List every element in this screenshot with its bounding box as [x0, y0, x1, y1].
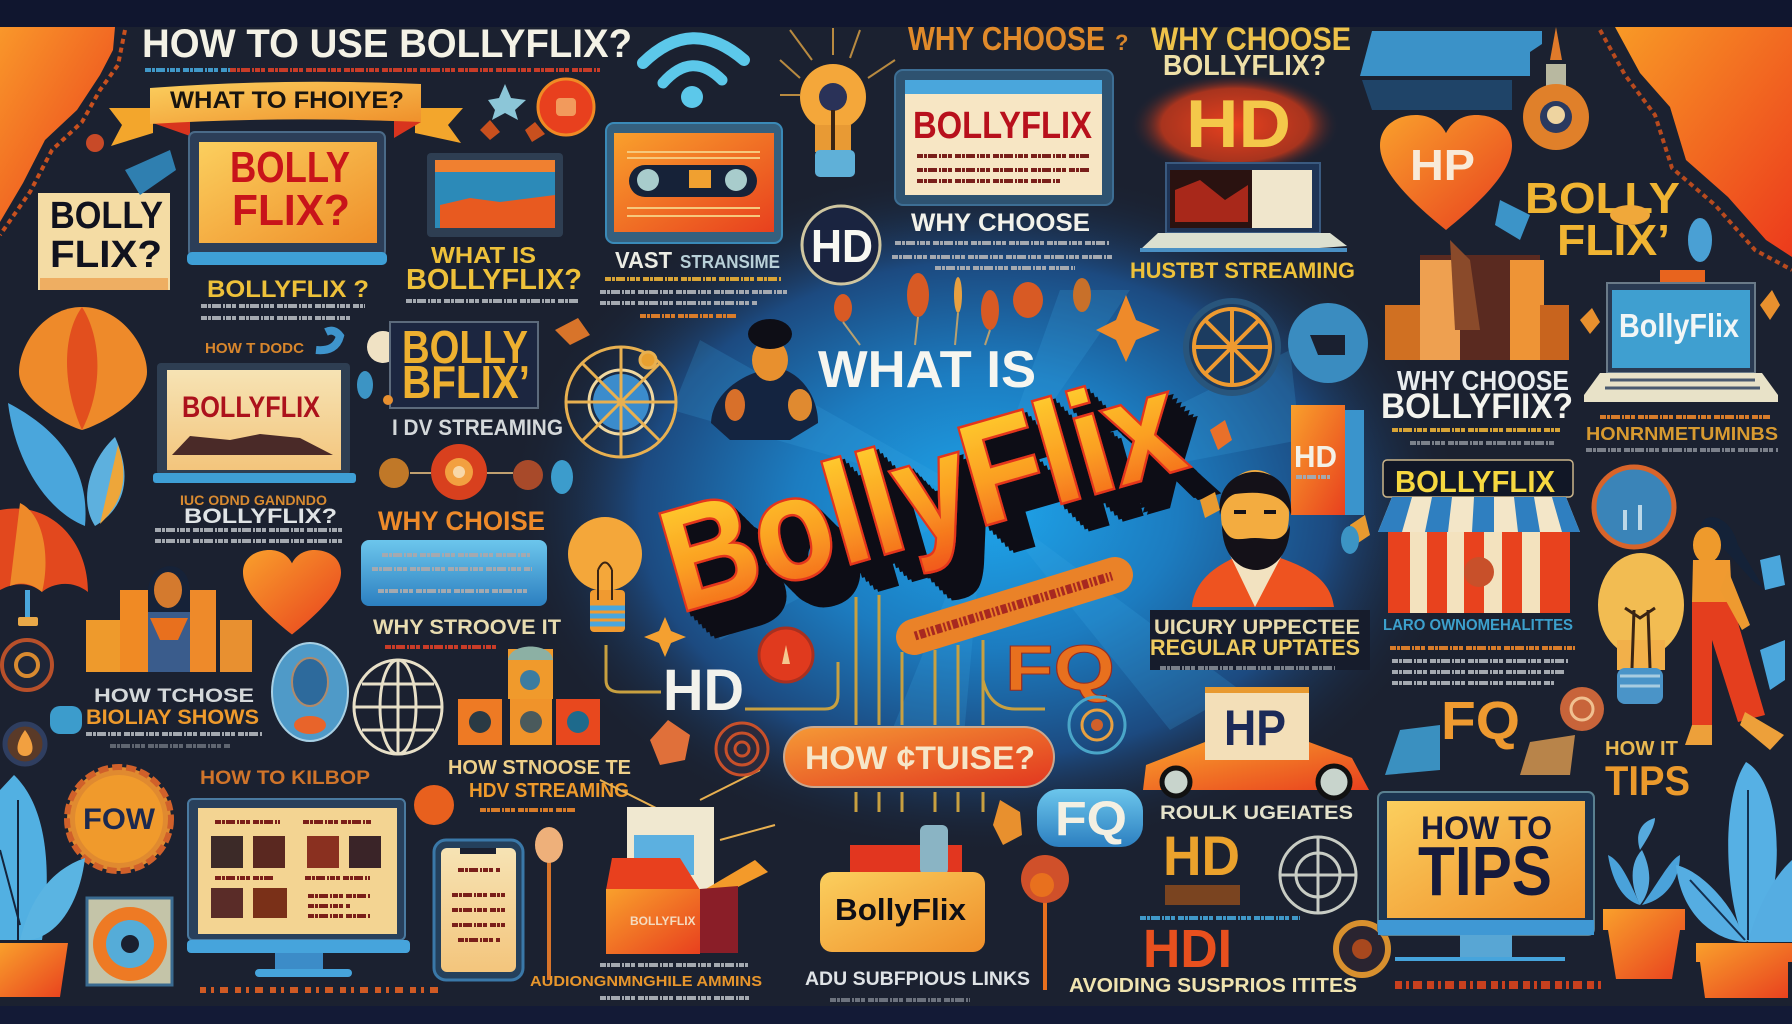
badge: hd circle: HD — [811, 220, 873, 272]
man: dark hair left — [711, 319, 818, 440]
icon: light bulb left — [568, 517, 642, 632]
label: hd orange stack: HD — [1163, 824, 1240, 887]
label: how it tips — [1605, 738, 1690, 804]
curtain: top right — [1600, 27, 1792, 270]
label: vast streaming: STRANSIME — [680, 252, 780, 272]
icon: target right — [1069, 697, 1125, 753]
box: bolly bflix: BOLLY — [402, 321, 528, 373]
label: how it tips: TIPS — [1605, 757, 1690, 804]
label: why choose bollyflix gold: WHY CHOOSE — [1151, 21, 1351, 57]
label: i dv streaming: I DV STREAMING — [392, 415, 563, 440]
person: bearded man — [1192, 470, 1334, 607]
label: adu subfpious links: ADU SUBFPIOUS LINKS — [805, 969, 1030, 990]
icon: spiral target — [716, 723, 768, 775]
label: how stnoose: HOW STNOOSE TE — [448, 757, 631, 779]
icon: globe right — [1280, 837, 1356, 913]
label: how stnoose — [448, 757, 631, 810]
icon: heart hp — [1380, 115, 1512, 230]
row: small orange marks — [200, 987, 440, 993]
icon: orange gem — [993, 800, 1022, 845]
card: bolly flix: FLIX? — [50, 234, 162, 276]
label: bolly flix gold right — [1525, 174, 1680, 265]
icon: gem orange — [650, 720, 690, 765]
label: hd orange stack — [1140, 824, 1300, 979]
box: bolly bflix: BFLIX’ — [402, 356, 530, 408]
button: how to use — [784, 727, 1054, 787]
label: what is bollyflix: WHAT IS — [431, 242, 536, 268]
curtain: top left — [0, 27, 125, 235]
monitor: bollyflix: BOLLYFLIX — [182, 391, 320, 424]
label: what is bollyflix: BOLLYFLIX? — [406, 264, 582, 296]
label: vast streaming — [600, 247, 787, 316]
icon: heart left — [243, 550, 341, 635]
label: luxury upperte regular updates: REGULAR UPTATES — [1150, 635, 1360, 660]
monitor: how to tips: TIPS — [1418, 832, 1552, 910]
badge: fow — [67, 767, 171, 871]
label: why choose bollyflix right: BOLLYFIIX? — [1381, 387, 1573, 426]
button: how to use: HOW ¢TUISE? — [805, 740, 1035, 776]
icon: star small — [644, 617, 686, 657]
monitor: how to tips: HOW TO — [1421, 810, 1552, 846]
label: why choose bollyflix gold: BOLLYFLIX? — [1163, 50, 1326, 82]
circuit lines — [606, 595, 1045, 812]
icon: gold circle — [1336, 923, 1388, 975]
card: bollyflix — [820, 825, 985, 952]
panel: blue info — [361, 540, 547, 606]
label: how to choose bolly shows — [86, 686, 262, 746]
plant: bottom left — [0, 775, 85, 997]
person: woman — [1685, 517, 1784, 750]
label: why choose white — [892, 209, 1112, 268]
box: bolly bflix — [390, 321, 538, 408]
icon: red button — [759, 628, 813, 682]
card: bollyflix: BollyFlix — [835, 892, 967, 927]
tablet: streaming scene — [427, 153, 563, 237]
badge: fow: FOW — [83, 803, 156, 836]
label: luxury upperte regular updates: UICURY UPPECTEE — [1154, 616, 1360, 639]
laptop: hd streaming — [1130, 73, 1347, 252]
label: hd white: HD — [663, 658, 744, 723]
card: bolly flix — [38, 193, 170, 290]
label: hd orange stack: HDI — [1143, 919, 1232, 979]
label: how to kilbop: HOW TO KILBOP — [200, 768, 370, 789]
icons: target row — [379, 444, 573, 500]
shape: top right blue blob — [1360, 31, 1542, 110]
poster: woman — [86, 566, 252, 672]
label: bolly flix gold right: FLIX’ — [1557, 216, 1670, 265]
shapes: blue and tan cluster — [1385, 725, 1575, 775]
label: what is bollyflix — [406, 242, 582, 301]
laptop: hd streaming: HD — [1186, 86, 1291, 162]
icon: umbrella — [0, 503, 88, 626]
label: bollyflix white: IUC ODND GANDNDO — [180, 492, 327, 508]
icon: wifi — [643, 38, 744, 108]
label: why choise: WHY CHOISE — [378, 506, 545, 536]
monitor: bolly flix — [187, 132, 387, 265]
label: honrnmetumines: HONRNMETUMINBS — [1586, 424, 1778, 444]
plant: big right — [1676, 762, 1792, 998]
badge: fq blue: FQ — [1055, 793, 1127, 846]
label: why choose orange: WHY CHOOSE — [908, 20, 1105, 57]
car: hp card: HP — [1224, 700, 1286, 756]
icon: globe — [354, 660, 442, 754]
icon: open box: BOLLYFLIX — [630, 914, 696, 928]
icon: round portal — [1594, 467, 1674, 547]
label: fq orange: FQ — [1005, 632, 1115, 704]
icons: scattered small accents — [86, 120, 1785, 690]
label: avoiding suspicious sites: AVOIDING SUSPRIOS ITITES — [1069, 975, 1357, 997]
icon: light bulb top — [780, 28, 895, 177]
monitor: bollyflix — [153, 363, 356, 483]
browser: bollyflix — [895, 70, 1113, 205]
label: how to choose bolly shows: HOW TCHOSE — [94, 686, 254, 707]
icon: balloon — [19, 307, 147, 430]
label: how t dodc: HOW T DODC — [205, 340, 304, 357]
icon: glass egg — [272, 643, 348, 741]
icon: orange speaker blocks — [458, 646, 600, 745]
label: cyan caption block — [1383, 617, 1575, 683]
label: fq gold: FQ — [1441, 691, 1520, 751]
cassette: vast streaming — [606, 123, 782, 243]
label: cyan caption block: LARO OWNOMEHALITTES — [1383, 617, 1573, 634]
icon: lollipop left — [535, 827, 563, 980]
icon: heart hp: HP — [1410, 141, 1475, 190]
icon: pendant lamp — [1523, 27, 1589, 150]
icon: wheel — [1186, 301, 1278, 393]
title: how to use bollyflix: HOW TO USE BOLLYFLIX? — [142, 22, 632, 66]
label: bollyflix white: BOLLYFLIX? — [184, 505, 337, 528]
icon: blue circle people — [1288, 303, 1368, 383]
wordmark: bollyflix: BollyFlix — [644, 341, 1198, 642]
card: bolly flix: BOLLY — [50, 195, 163, 237]
ribbon: what to fhoiye: WHAT TO FHOIYE? — [170, 87, 404, 114]
badge: hd circle — [802, 206, 880, 284]
icon: lollipop right — [1021, 855, 1069, 990]
label: hustbt streaming: HUSTBT STREAMING — [1130, 258, 1355, 283]
poster: doorway — [1385, 240, 1569, 360]
label: bollyflix white — [155, 492, 342, 541]
title: what is: WHAT IS — [818, 341, 1036, 399]
icon: light bulb right — [1598, 553, 1684, 704]
pill: orange tagline — [914, 575, 1115, 637]
phone: app list — [434, 840, 523, 980]
monitor: bolly flix: BOLLY — [230, 143, 350, 192]
label: why stroove it: WHY STROOVE IT — [373, 616, 561, 639]
icon: white blob — [367, 331, 399, 363]
label: vast streaming: VAST — [615, 247, 672, 273]
monitor: show grid — [187, 799, 410, 977]
label: how stnoose: HDV STREAMING — [469, 780, 629, 802]
icon: eye square — [87, 898, 172, 985]
row: red marks — [1395, 981, 1605, 989]
label: luxury upperte regular updates — [1150, 610, 1370, 670]
icon: at circle — [1560, 687, 1604, 731]
icon: blue swirl — [316, 331, 340, 350]
book: hd: HD — [1294, 439, 1337, 474]
plant: small right — [1603, 818, 1685, 979]
label: why choose bollyflix right: WHY CHOOSE — [1397, 365, 1569, 396]
label: bollyflix yellow — [201, 276, 369, 318]
icons: pendants — [834, 273, 1091, 345]
label: why choose orange: ? — [1115, 30, 1128, 55]
icons: round badges left — [2, 640, 82, 764]
book: hd — [1291, 405, 1364, 515]
icon: orange star large — [1096, 295, 1160, 362]
label: why choose bollyflix gold — [1151, 21, 1351, 82]
icon: red button — [538, 79, 594, 135]
icon: blue leaves — [8, 403, 125, 526]
monitor: bolly flix: FLIX? — [232, 186, 350, 235]
icon: open box — [600, 770, 775, 954]
label: why choose bollyflix right — [1381, 365, 1573, 443]
label: how to choose bolly shows: BIOLIAY SHOWS — [86, 706, 259, 729]
label: bolly flix gold right: BOLLY — [1525, 174, 1680, 223]
ribbon: what to fhoiye — [109, 82, 463, 146]
storefront: bollyflix: BOLLYFLIX — [1395, 464, 1555, 499]
label: regular updates: ROULK UGEIATES — [1160, 803, 1353, 824]
car: hp card — [1143, 687, 1369, 798]
label: why choose white: WHY CHOOSE — [911, 209, 1090, 237]
storefront: bollyflix — [1378, 460, 1580, 613]
icon: small red circle — [414, 785, 454, 825]
label: bollyflix yellow: BOLLYFLIX ? — [207, 276, 369, 303]
label: how it tips: HOW IT — [1605, 738, 1678, 760]
badge: fq blue — [1037, 789, 1143, 847]
laptop: bollyflix blue: BollyFlix — [1619, 307, 1740, 344]
icon: star — [488, 84, 526, 120]
browser: bollyflix: BOLLYFLIX — [913, 105, 1093, 147]
monitor: how to tips — [1378, 792, 1594, 961]
icon: compass wheel — [566, 347, 676, 457]
laptop: bollyflix blue — [1584, 270, 1778, 402]
label: bottom left caption: AUDIONGNMNGHILE AMMINS — [530, 973, 762, 990]
